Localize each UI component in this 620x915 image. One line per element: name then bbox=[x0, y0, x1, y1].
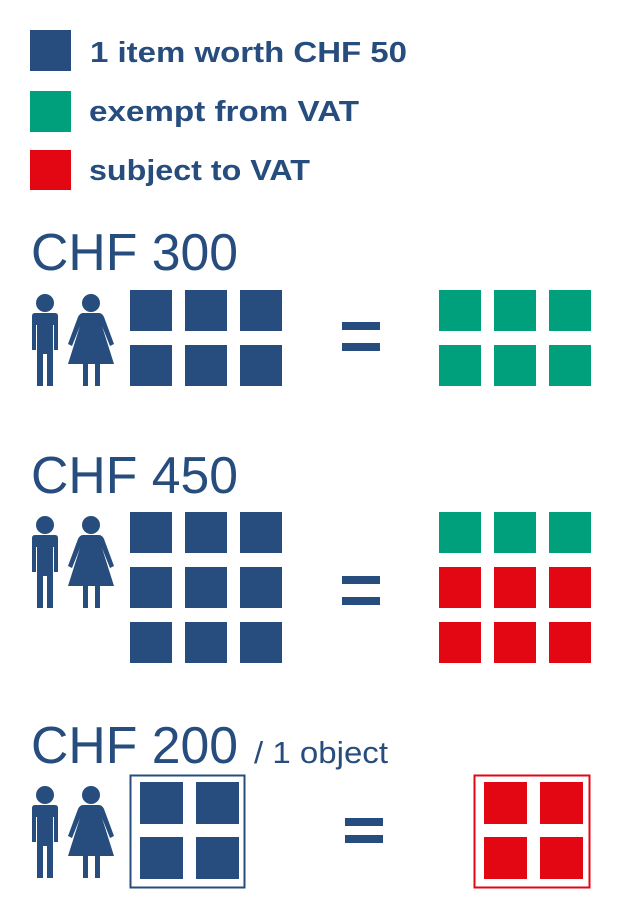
legend: subject to VAT: subject to VAT bbox=[89, 155, 310, 187]
heading CHF 450: CHF 450 bbox=[31, 447, 238, 505]
result: green and red items bbox=[439, 512, 591, 663]
section: CHF 450 bbox=[31, 447, 591, 663]
equals bbox=[345, 818, 383, 843]
icon: people bbox=[32, 786, 114, 878]
green items 6 bbox=[439, 290, 591, 386]
red object box bbox=[474, 776, 590, 888]
heading CHF 200 / 1 object: CHF 200 bbox=[31, 717, 238, 775]
legend: subject to VAT bbox=[30, 150, 310, 190]
legend: exempt from VAT: exempt from VAT bbox=[89, 96, 359, 128]
section: CHF 200 / 1 object bbox=[31, 717, 590, 888]
legend: item worth CHF 50 bbox=[30, 30, 407, 71]
equals bbox=[342, 576, 380, 605]
icon: people bbox=[32, 294, 114, 386]
heading CHF 300: CHF 300 bbox=[31, 224, 238, 282]
legend bbox=[30, 30, 407, 190]
blue items 9 bbox=[130, 512, 282, 663]
heading CHF 200 / 1 object: / 1 object bbox=[254, 735, 388, 770]
equals bbox=[342, 322, 380, 351]
blue items 6 bbox=[130, 290, 282, 386]
legend: exempt from VAT bbox=[30, 91, 359, 132]
legend: item worth CHF 50: 1 item worth CHF 50 bbox=[90, 37, 407, 69]
section: CHF 300 bbox=[31, 224, 591, 386]
blue object box bbox=[130, 776, 244, 888]
icon: people bbox=[32, 516, 114, 608]
